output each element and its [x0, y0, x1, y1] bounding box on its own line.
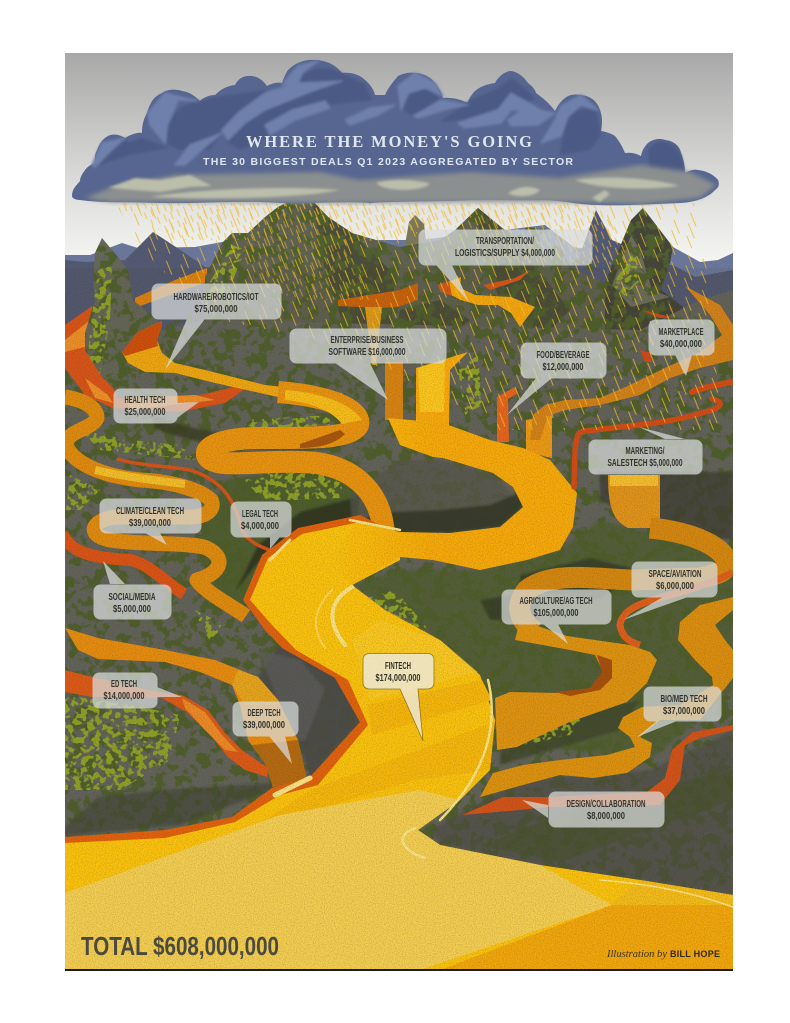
callout: health: HEALTH TECH [124, 394, 166, 406]
callout: deep tech [232, 702, 298, 764]
far slate ridge [65, 232, 733, 340]
callout: health: $25,000,000 [124, 406, 166, 418]
main river bank [65, 515, 733, 970]
main river bands [65, 620, 733, 970]
credit name: BILL HOPE [670, 949, 720, 959]
callout: space [623, 562, 718, 620]
title: WHERE THE MONEY'S GOING [246, 132, 532, 151]
right massif [605, 208, 684, 330]
river: bio/med upper [660, 597, 733, 720]
river: deep tech yellow stretch [232, 670, 280, 705]
print grain [65, 268, 733, 970]
spire moss [88, 265, 112, 375]
dense rain near cloud [120, 203, 640, 265]
river: ed tech [65, 670, 268, 777]
infographic: where the money's going [65, 53, 733, 971]
spire behind massif [405, 215, 426, 246]
subtitle: THE 30 BIGGEST DEALS Q1 2023 AGGREGATED BY SECTOR [203, 156, 573, 168]
river: hardware bright band [285, 390, 362, 424]
land colour regions [65, 412, 733, 895]
callout: health [114, 388, 199, 424]
callout: food: FOOD/BEVERAGE [536, 349, 590, 361]
callout: bio/med: $37,000,000 [663, 705, 705, 717]
river: design collaboration [462, 725, 733, 815]
callout: agriculture [502, 590, 612, 644]
callout: agriculture: $105,000,000 [534, 607, 579, 619]
river: social media [62, 533, 184, 594]
callout: design [522, 792, 664, 828]
callout: marketing: SALESTECH $5,000,000 [608, 457, 683, 469]
main massif [205, 203, 605, 330]
river: bio/med lower [480, 705, 680, 797]
callout: climate: CLIMATE/CLEAN TECH [116, 505, 184, 517]
waterfall: enterprise left [385, 362, 403, 420]
callout: space: SPACE/AVIATION [648, 568, 702, 580]
credit: Illustration by [606, 949, 668, 960]
river: marketplace red accents [640, 310, 671, 362]
plateau river [330, 418, 577, 585]
lime moss patches [65, 245, 640, 790]
callout: enterprise [290, 328, 446, 400]
callout: social: SOCIAL/MEDIA [108, 591, 156, 603]
callout: deep tech: $39,000,000 [243, 719, 285, 731]
waterfall: enterprise pillar [365, 307, 382, 365]
callout: enterprise: SOFTWARE $16,000,000 [328, 346, 406, 358]
river: hardware hairpin [207, 392, 384, 536]
waterfall: enterprise main [416, 352, 468, 425]
main river [65, 522, 733, 970]
callout: legal: $4,000,000 [241, 520, 279, 532]
callout: climate: $39,000,000 [129, 517, 171, 529]
cloud [72, 60, 719, 205]
callout: food [507, 342, 606, 415]
callout: marketplace: $40,000,000 [660, 338, 702, 350]
river: health tech [65, 306, 255, 412]
river: hardware crescent [122, 321, 342, 402]
river: transportation red tip [438, 270, 530, 296]
river: marketing lower channel [520, 528, 727, 632]
waterfall: marketplace [526, 415, 552, 458]
waterfall: food [497, 387, 518, 442]
callout: design: DESIGN/COLLABORATION [566, 798, 646, 810]
left spire [85, 238, 160, 390]
river: hardware shadow [300, 430, 345, 448]
river: marketplace [530, 286, 733, 440]
river: legal tech [117, 459, 280, 554]
callout: design: $8,000,000 [587, 810, 625, 822]
callout: ed tech: $14,000,000 [104, 690, 145, 702]
river: hardware back channel [135, 268, 207, 308]
callout: hardware [152, 284, 282, 370]
river: deep tech [65, 628, 307, 787]
callout: legal [230, 502, 292, 549]
spire texture [85, 245, 158, 390]
river: agriculture shadow [555, 655, 612, 696]
callout: enterprise: ENTERPRISE/BUSINESS [330, 334, 404, 346]
river: space aviation [620, 572, 733, 645]
callout: bio/med: BIO/MED TECH [660, 693, 708, 705]
river: marketing red [574, 382, 733, 487]
callout: agriculture: AGRICULTURE/AG TECH [520, 595, 592, 607]
callout: marketplace [648, 320, 714, 376]
cloud dark lobes [100, 68, 685, 175]
callout: hardware: $75,000,000 [194, 303, 238, 315]
cloud pale streaks [108, 175, 680, 202]
callout: marketing [588, 427, 702, 474]
waterfall: marketing [608, 475, 660, 528]
river: enterprise top channel [338, 283, 418, 308]
callout: ed tech [92, 672, 182, 708]
massif shadow [313, 203, 570, 328]
waterfall highlight [418, 360, 445, 412]
river: deep tech lower [252, 740, 307, 787]
right massif light face [612, 235, 670, 307]
callout: marketing: MARKETING/ [626, 445, 665, 457]
callout: transportation: TRANSPORTATION/ [476, 235, 534, 247]
waterfall: marketing highlight [610, 475, 658, 486]
callout: transportation [418, 230, 592, 302]
callout: social [94, 561, 172, 620]
river ripples [270, 520, 733, 907]
river: ed tech highlight [182, 698, 238, 752]
bottom rule [65, 969, 733, 971]
total: TOTAL $608,000,000 [81, 931, 279, 961]
rain [115, 203, 722, 430]
callout: fintech: FINTECH [385, 660, 411, 672]
callout: fintech: $174,000,000 [376, 672, 421, 684]
callout: fintech [363, 654, 434, 741]
callout: bio/med [637, 686, 722, 737]
callout: social: $5,000,000 [113, 603, 151, 615]
river: climate highlight [95, 470, 185, 484]
ground [65, 290, 733, 895]
mottled texture on land [65, 203, 733, 894]
distant blue ridge [65, 225, 733, 277]
callout: hardware: HARDWARE/ROBOTICS/IOT [174, 291, 259, 303]
river: climate [65, 397, 246, 616]
river: health tech highlights [65, 320, 215, 410]
river: hardware crescent red top [122, 321, 162, 356]
callout: legal: LEGAL TECH [242, 508, 278, 520]
callout: food: $12,000,000 [542, 361, 584, 373]
sky [65, 53, 733, 270]
callout: ed tech: ED TECH [111, 678, 137, 690]
callout: space: $6,000,000 [656, 580, 694, 592]
callout: marketplace: MARKETPLACE [658, 326, 704, 338]
cloud underside grey band [85, 165, 716, 204]
callout: deep tech: DEEP TECH [248, 707, 280, 719]
callout: climate [100, 498, 202, 545]
river: agriculture lower [495, 620, 657, 750]
slate spike right [579, 210, 621, 265]
callout: transportation: LOGISTICS/SUPPLY $4,000,000 [455, 247, 555, 259]
river: transportation [438, 277, 535, 327]
cloud light streaks [92, 61, 598, 167]
dense rain on peak [240, 203, 375, 300]
